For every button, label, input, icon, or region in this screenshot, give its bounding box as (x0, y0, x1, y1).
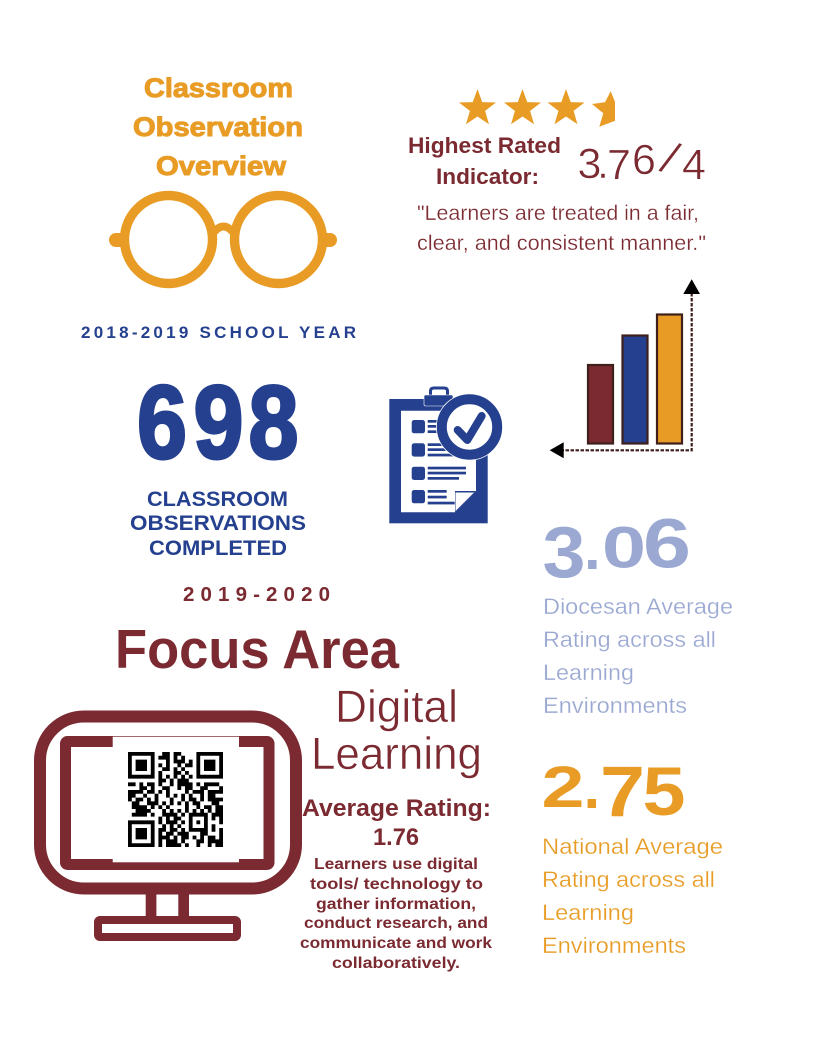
rating score (578, 131, 706, 189)
national average caption: Learning (542, 900, 634, 925)
quote: "Learners are treated in a fair, (417, 202, 699, 225)
observations label: COMPLETED (149, 536, 287, 560)
stat: diocesan average 3.06: 0 (602, 516, 646, 580)
title: Classroom (144, 73, 293, 103)
stat: diocesan average 3.06: 6 (643, 504, 691, 582)
observations label: CLASSROOM (147, 487, 288, 511)
rating score: . (597, 140, 609, 188)
observations label (130, 487, 306, 560)
rating score: 4 (682, 141, 706, 189)
title: Overview (156, 151, 287, 181)
focus area description (300, 856, 492, 972)
national average caption: National Average (542, 834, 723, 859)
focus area description: collaboratively. (332, 955, 460, 972)
icon: rating stars (459, 89, 615, 127)
school year label: 2018-2019 SCHOOL YEAR (81, 323, 356, 342)
quote (417, 202, 706, 255)
big number 698: 8 (248, 365, 298, 481)
diocesan average caption: Environments (543, 693, 687, 718)
stat: diocesan average 3.06 (542, 504, 691, 593)
stat: national average 2.75: 2 (542, 755, 584, 820)
heading: highest rated indicator (408, 133, 561, 189)
icon: bar chart (550, 279, 700, 458)
icon: glasses (116, 196, 330, 284)
national average caption (542, 834, 723, 958)
focus area description: Learners use digital (314, 856, 478, 873)
average rating: 1.76 (373, 824, 419, 851)
national average caption: Rating across all (542, 867, 715, 892)
average rating: Average Rating: (302, 795, 491, 822)
rating score: 7 (607, 141, 631, 189)
average rating (302, 795, 491, 851)
focus area description: tools/ technology to (310, 876, 483, 893)
focus area description: communicate and work (300, 935, 492, 952)
title (133, 73, 303, 181)
stat: diocesan average 3.06: 3 (542, 513, 586, 593)
quote: clear, and consistent manner." (417, 232, 706, 255)
big number 698: 9 (194, 365, 244, 481)
focus area description: conduct research, and (304, 915, 488, 932)
diocesan average caption: Learning (543, 660, 634, 685)
heading: digital learning: Learning (311, 728, 482, 779)
stat: diocesan average 3.06: . (584, 515, 601, 582)
stat: national average 2.75: . (584, 754, 600, 821)
big number 698 (137, 365, 298, 481)
focus year label: 2019-2020 (183, 583, 330, 606)
rating score: 6 (632, 136, 656, 184)
diocesan average caption: Rating across all (543, 627, 716, 652)
heading: highest rated indicator: Highest Rated (408, 133, 561, 158)
heading: digital learning (311, 681, 482, 779)
focus area description: gather information, (316, 896, 476, 913)
icon: clipboard checklist (389, 388, 503, 523)
stat: national average 2.75: 7 (600, 753, 645, 832)
rating score: / (654, 131, 686, 185)
heading: focus area: Focus Area (115, 618, 399, 680)
heading: highest rated indicator: Indicator: (436, 164, 539, 189)
diocesan average caption (543, 594, 733, 718)
rating score: 3 (578, 140, 601, 188)
stat: national average 2.75: 5 (642, 753, 686, 830)
national average caption: Environments (542, 933, 686, 958)
heading: digital learning: Digital (335, 681, 458, 732)
stat: national average 2.75 (542, 753, 686, 832)
big number 698: 6 (137, 365, 187, 481)
icon: computer monitor with QR code (40, 716, 296, 937)
title: Observation (133, 112, 303, 142)
observations label: OBSERVATIONS (130, 511, 306, 535)
diocesan average caption: Diocesan Average (543, 594, 733, 619)
